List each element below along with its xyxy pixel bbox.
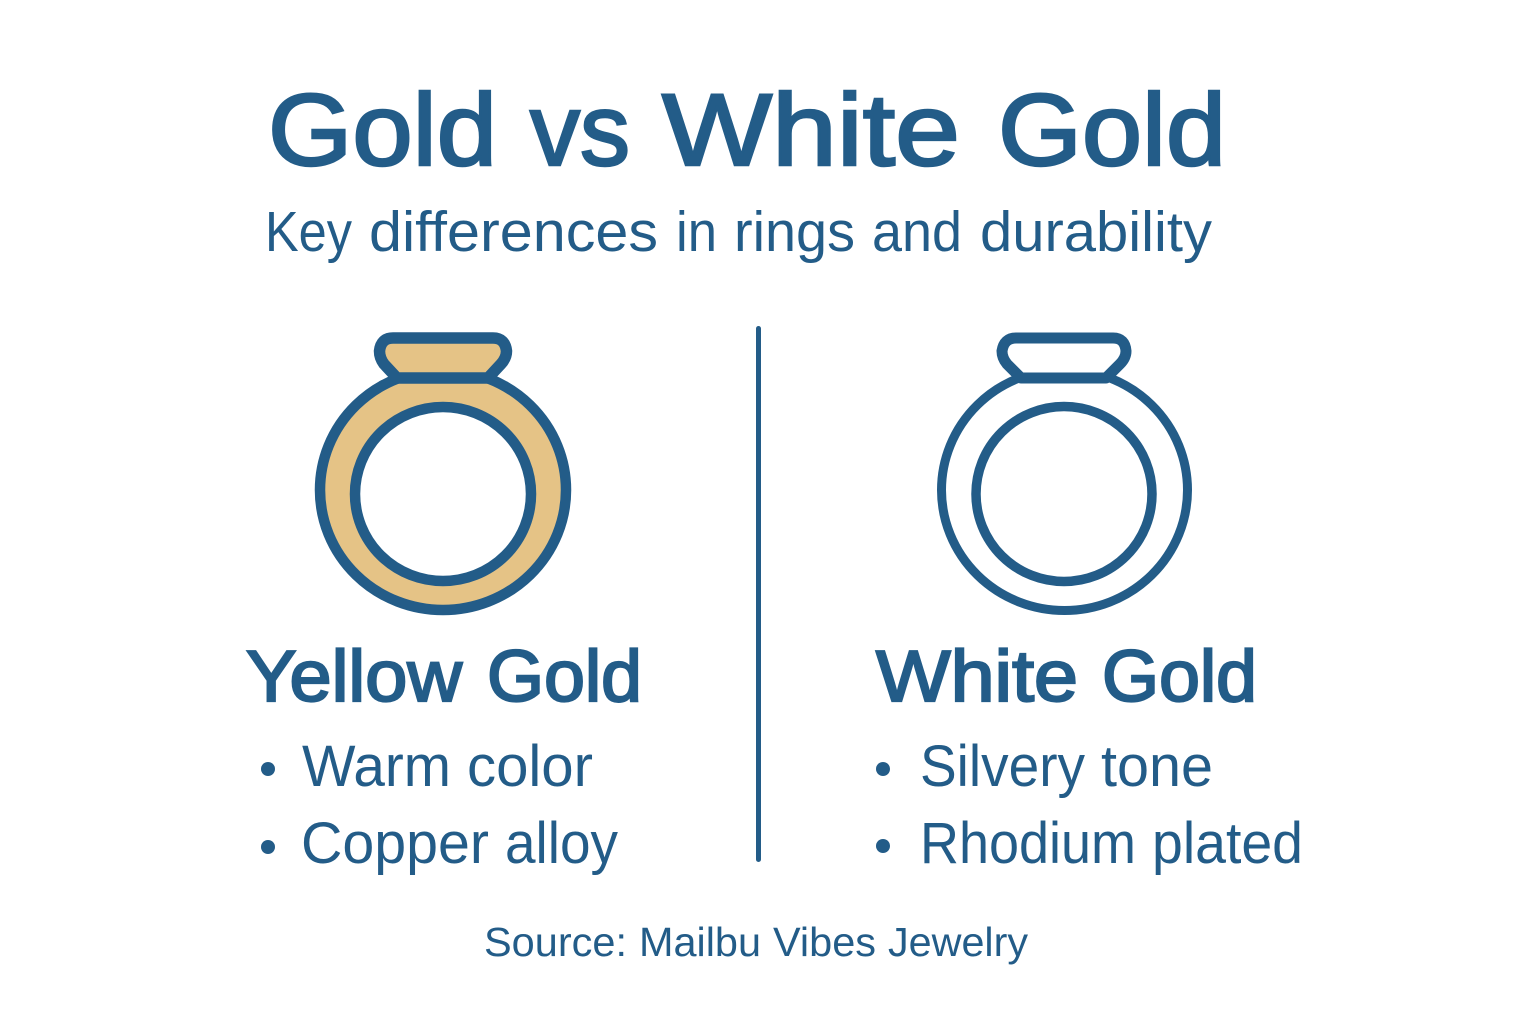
subtitle: in — [676, 200, 717, 264]
bullet — [261, 762, 275, 776]
list: yellow gold features — [261, 734, 618, 876]
item: rhodium plated: plated — [1152, 811, 1303, 876]
source note: Jewelry — [888, 919, 1028, 965]
panel: white gold — [876, 338, 1303, 876]
item: warm color: color — [467, 734, 593, 799]
list: white gold features — [876, 734, 1303, 876]
subtitle: rings — [734, 200, 855, 264]
heading: white gold: Gold — [1102, 637, 1257, 717]
item: copper alloy: Copper — [301, 811, 489, 876]
icon: yellow gold ring — [320, 338, 566, 610]
item: silvery tone: tone — [1101, 734, 1213, 799]
subtitle: Key — [265, 200, 352, 264]
source note: Mailbu — [639, 919, 761, 965]
title: Gold — [998, 73, 1226, 187]
source note: Vibes — [773, 919, 876, 965]
heading: white gold: White — [876, 637, 1078, 717]
icon: white gold ring — [942, 338, 1188, 610]
title: Gold — [268, 73, 497, 187]
subtitle: durability — [980, 200, 1212, 264]
heading: yellow gold: Yellow — [246, 637, 463, 717]
title: vs — [530, 73, 630, 187]
item: silvery tone: Silvery — [920, 734, 1085, 799]
bullet — [876, 762, 890, 776]
item: warm color: Warm — [302, 734, 451, 799]
source note: Source: — [484, 919, 627, 965]
title: White — [662, 73, 960, 187]
subtitle: and — [872, 200, 962, 264]
divider — [756, 326, 761, 862]
bullet — [876, 839, 890, 853]
heading: yellow gold: Gold — [487, 637, 642, 717]
subtitle: differences — [369, 200, 658, 264]
panel: yellow gold — [246, 338, 642, 876]
bullet — [261, 840, 275, 854]
item: rhodium plated: Rhodium — [920, 811, 1136, 876]
item: copper alloy: alloy — [505, 811, 618, 876]
